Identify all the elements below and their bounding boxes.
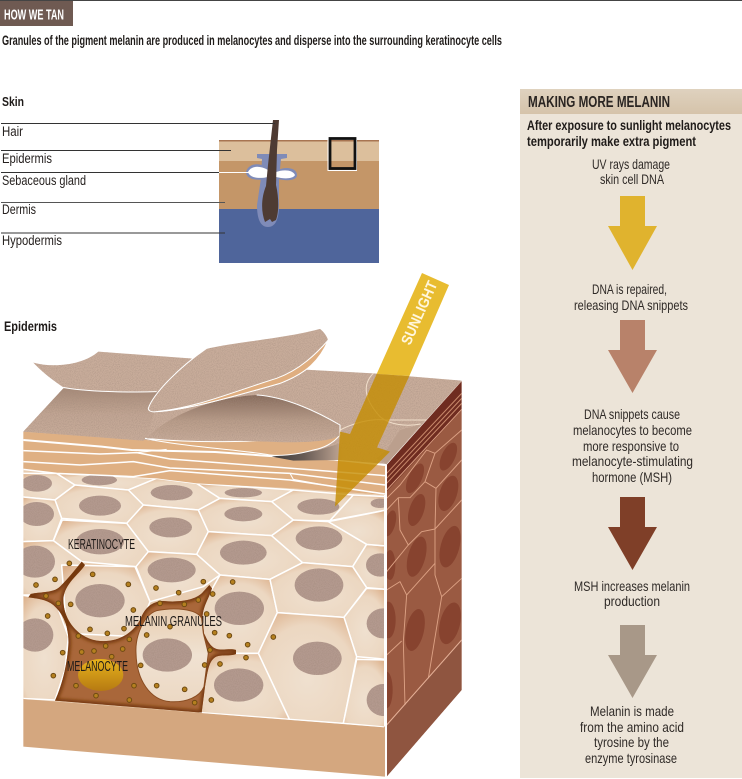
step: msh: production: [604, 593, 660, 609]
step: uv rays: skin cell DNA: [600, 171, 665, 187]
epidermis block illustration: [15, 273, 465, 777]
middle flake: [148, 328, 328, 412]
right flake outline: [340, 373, 427, 430]
label: sebaceous gland: Sebaceous gland: [2, 173, 86, 188]
arrow 4: [608, 625, 657, 698]
lower flake: [145, 395, 340, 455]
melanin granules: [34, 561, 276, 705]
arrow 1: [608, 196, 657, 270]
skin layers: [219, 140, 379, 263]
label: hypodermis: Hypodermis: [2, 233, 62, 248]
sebaceous gland: [246, 164, 297, 180]
label: keratinocyte: KERATINOCYTE: [68, 536, 135, 553]
panel intro: temporarily make extra pigment: [527, 134, 696, 149]
hair follicle: [257, 154, 287, 227]
arrow 3: [608, 497, 657, 570]
skin cross-section diagram: [1, 94, 379, 263]
panel intro: [527, 118, 731, 149]
panel header: MAKING MORE MELANIN: [528, 94, 670, 111]
step: dna snippets: more responsive to: [583, 438, 679, 454]
panel header: [520, 89, 742, 114]
sunlight arrow: [335, 273, 449, 507]
label: hair: Hair: [2, 124, 23, 139]
step: dna repaired: [574, 281, 688, 313]
left flake: [33, 352, 190, 392]
top surface: [23, 358, 462, 464]
step: melanin made: enzyme tyrosinase: [585, 750, 677, 766]
keratinocyte cells: [23, 470, 384, 728]
step: dna snippets: melanocyte-stimulating: [572, 453, 693, 469]
heading: skin: Skin: [2, 94, 24, 109]
step: dna snippets: melanocytes to become: [573, 422, 692, 438]
step: msh: MSH increases melanin: [574, 578, 690, 594]
step: dna snippets: DNA snippets cause: [584, 406, 680, 422]
step: melanin made: from the amino acid: [580, 719, 684, 735]
title banner: HOW WE TAN: [4, 6, 64, 24]
stratified layers: [23, 432, 385, 495]
detail box: [328, 137, 356, 170]
melanocyte: [28, 561, 276, 713]
heading: epidermis: Epidermis: [4, 319, 57, 334]
step: dna snippets: [572, 406, 693, 485]
step: msh: [574, 578, 690, 609]
step: dna repaired: releasing DNA snippets: [574, 297, 688, 313]
cell nuclei: [15, 475, 400, 716]
label: melanin granules: MELANIN GRANULES: [125, 613, 222, 630]
step: melanin made: Melanin is made: [590, 703, 674, 719]
step: uv rays: [592, 156, 670, 187]
label: dermis: Dermis: [2, 202, 36, 217]
label: melanocyte: MELANOCYTE: [67, 658, 128, 675]
step: uv rays: UV rays damage: [592, 156, 670, 172]
label: epidermis: Epidermis: [2, 151, 52, 166]
sunlight label: SUNLIGHT: [398, 279, 441, 348]
step: dna snippets: hormone (MSH): [592, 469, 672, 485]
title banner: [0, 1, 73, 26]
side face: [386, 381, 462, 776]
shadowed gap: [272, 443, 343, 461]
top rule: [0, 0, 742, 1]
step: dna repaired: DNA is repaired,: [592, 281, 667, 297]
base strip: [23, 698, 385, 777]
melanocyte inner cell: [136, 609, 208, 702]
panel: making more melanin: [520, 89, 742, 778]
step: melanin made: [580, 703, 684, 766]
right edge highlight: [385, 465, 387, 777]
step: melanin made: tyrosine by the: [594, 734, 669, 750]
melanocyte nucleus: [78, 659, 123, 691]
hair: [262, 120, 279, 222]
arrow 2: [608, 320, 657, 393]
